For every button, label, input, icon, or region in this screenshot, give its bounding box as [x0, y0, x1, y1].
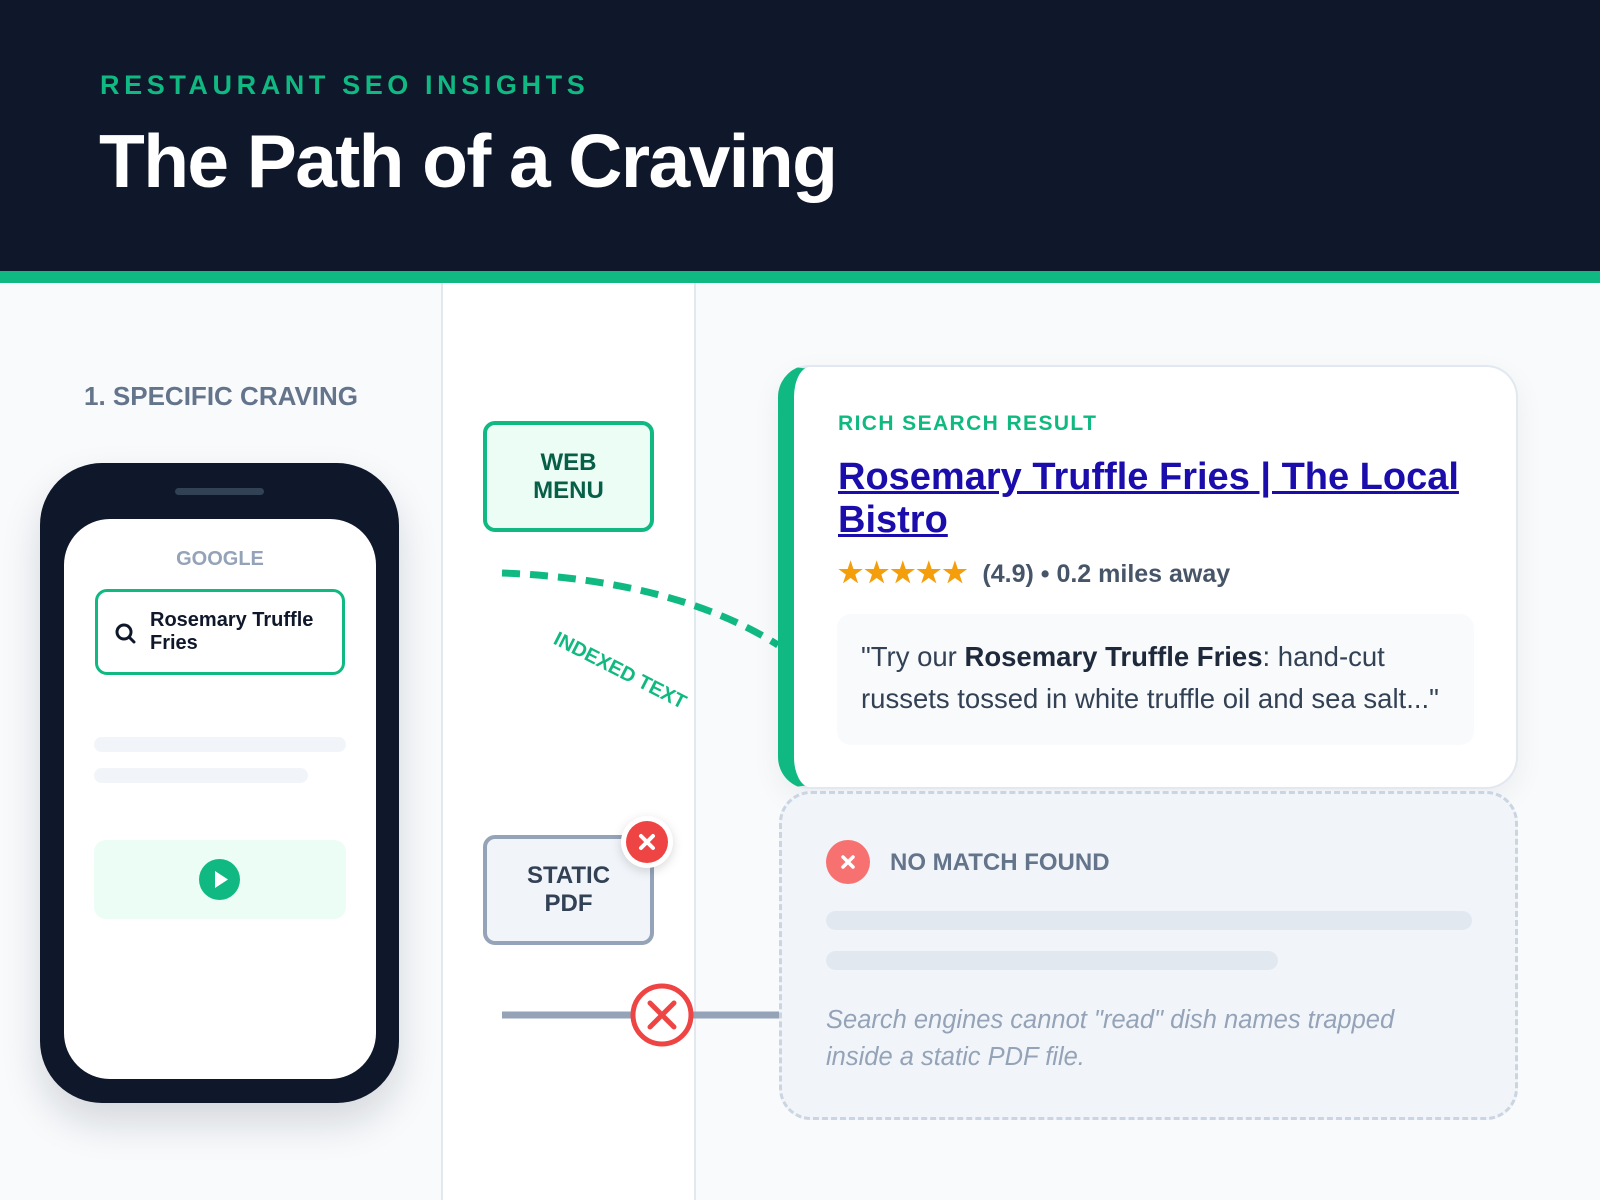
snippet: [837, 614, 1474, 745]
phone: [40, 463, 399, 1103]
result label: RICH SEARCH RESULT: [838, 412, 1097, 435]
arrow: indexed path: [502, 570, 778, 648]
search box: [95, 589, 345, 675]
static pdf box: [483, 835, 654, 945]
screen: [64, 519, 376, 1079]
web menu box: [483, 421, 654, 532]
middle column background: [441, 283, 696, 1200]
query text: Rosemary Truffle: [150, 609, 313, 631]
placeholder bars: [826, 911, 1472, 970]
header: [0, 0, 1600, 283]
static pdf box: STATIC: [527, 862, 610, 889]
indexed text label: INDEXED TEXT: [550, 628, 690, 714]
web menu box: WEB: [540, 448, 596, 476]
placeholder bars: [94, 737, 346, 783]
arrow: blocked path: [502, 984, 779, 1046]
result title link: Rosemary Truffle Fries | The Local Bistro: [838, 456, 1459, 541]
query text: [150, 609, 313, 654]
step label: 1. SPECIFIC CRAVING: [84, 381, 358, 411]
icon: no match: [826, 840, 870, 884]
static pdf box: PDF: [544, 890, 592, 917]
snippet: "Try our Rosemary Truffle Fries: hand-cut russets tossed in white truffle oil and sea salt...": [861, 641, 1439, 714]
panel: rich search result: [778, 365, 1518, 789]
rating line: ★★★★★ (4.9) • 0.2 miles away: [838, 557, 1230, 588]
panel: no match found: [779, 791, 1518, 1120]
eyebrow: RESTAURANT SEO INSIGHTS: [100, 70, 589, 100]
google label: GOOGLE: [176, 548, 264, 570]
web menu box: MENU: [533, 476, 604, 504]
title: The Path of a Craving: [99, 119, 836, 203]
result tile with play icon: [94, 840, 346, 919]
icon: error badge: [618, 816, 676, 874]
notch: [175, 488, 264, 495]
no match heading: NO MATCH FOUND: [890, 849, 1110, 876]
query text: Fries: [150, 632, 198, 654]
icon: search: [116, 624, 136, 644]
explanation text: Search engines cannot "read" dish names trapped inside a static PDF file.: [826, 1006, 1394, 1071]
